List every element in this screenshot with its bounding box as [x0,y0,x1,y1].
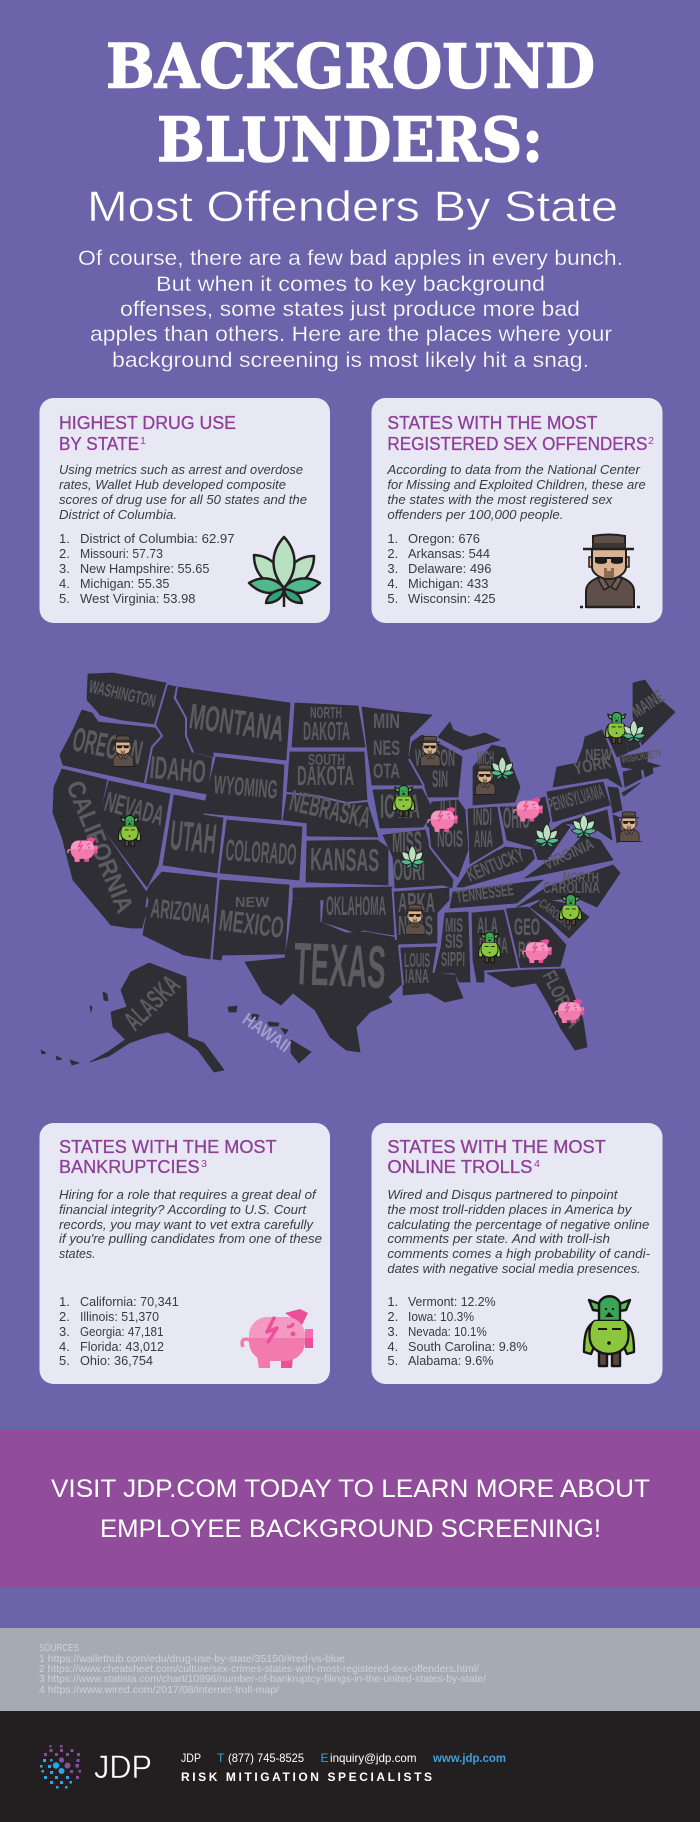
marker: pig, California [68,837,98,862]
text: bankruptcies description: if you're pulling candidates from one of these [59,1231,322,1246]
contact line: E [320,1751,329,1765]
state name labels: WASHINGTON [87,676,158,711]
intro paragraph: background screening is most likely hit a snag. [112,348,589,372]
state name labels: NEW [235,894,270,911]
heading: bankruptcies: BANKRUPTCIES [59,1157,200,1177]
panel: highest drug use [40,398,330,623]
list: bankruptcies ranking: 2. [59,1309,70,1324]
list: bankruptcies ranking: 4. [59,1339,70,1354]
intro paragraph [78,246,623,372]
marker: leaf, Missouri [400,845,425,870]
text: sex offenders description: offenders per 100,000 people. [387,507,563,522]
contact line [181,1751,506,1765]
list: drug use ranking: New Hampshire: 55.65 [80,561,209,576]
list: sex offenders ranking: Michigan: 433 [408,576,488,591]
state name labels: SIS [445,931,463,953]
text: drug use description [59,462,307,522]
contact line: (877) 745-8525 [228,1751,304,1765]
state name labels: CALIFORNIA [60,777,139,917]
state name labels: MIN [373,710,400,733]
list: bankruptcies ranking: Florida: 43,012 [80,1339,164,1354]
list: drug use ranking [59,531,235,606]
text: drug use description: rates, Wallet Hub developed composite [59,477,286,492]
list: sex offenders ranking: Oregon: 676 [408,531,480,546]
marker: troll, Nevada [118,815,141,846]
state name labels: SIN [432,766,448,793]
logo mark [40,1745,81,1788]
list: sex offenders ranking: Wisconsin: 425 [408,591,496,606]
list: drug use ranking: 3. [59,561,70,576]
list: trolls ranking: 5. [387,1353,398,1368]
state name labels: RGIA [518,937,544,964]
text: drug use description: scores of drug use for all 50 states and the [59,492,307,507]
state name labels: KENTUCKY [464,844,528,887]
marker: pig, Ohio [514,798,543,821]
state name labels: ALA [477,913,498,938]
marker: troll, Vermont [605,712,628,743]
marker: troll, Iowa [392,785,415,816]
state name labels: FLORIDA [538,967,585,1032]
icon: troll [584,1296,634,1366]
list: drug use ranking: 1. [59,531,70,546]
list: drug use ranking: 4. [59,576,70,591]
state name labels: NES [373,737,400,760]
marker: troll, Alabama [479,932,500,963]
text: bankruptcies description [59,1187,322,1261]
call to action banner [0,1430,700,1588]
state name labels: WISCON [415,745,455,772]
state name labels: MONTANA [187,695,287,749]
list: sex offenders ranking: 5. [387,591,398,606]
contact line: inquiry@jdp.com [330,1751,416,1765]
text: sex offenders description: According to data from the National Center [386,462,641,477]
list: drug use ranking: District of Columbia: 62.97 [80,531,235,546]
footer [0,1711,700,1822]
text: sex offenders description: the states with the most registered sex [387,492,613,507]
sources: 3 https://www.statista.com/chart/10996/number-of-bankruptcy-filings-in-the-united-states-by-state/ [39,1673,486,1685]
heading: trolls: ONLINE TROLLS [387,1157,532,1177]
state name labels: UTAH [168,811,219,863]
text: trolls description: Wired and Disqus partnered to pinpoint [387,1187,619,1202]
marker: pig, Illinois [428,807,458,832]
state name labels: HAWAII [239,1009,294,1056]
heading: sex offenders: STATES WITH THE MOST [387,413,597,433]
intro paragraph: But when it comes to key background [156,272,545,296]
state name labels: OTA [373,760,400,783]
state name labels: INDI [473,804,492,831]
state name labels: KANSAS [310,841,379,878]
state name labels: ANA [474,826,493,853]
marker: pig, Florida [555,999,584,1023]
icon: man in hat [580,534,640,607]
state name labels: DAKOTA [303,716,350,746]
panel: online trolls [372,1123,662,1384]
text: bankruptcies description: Hiring for a role that requires a great deal of [59,1187,317,1202]
text: trolls description: dates with negative social media presences. [387,1261,641,1276]
icon: broken piggy bank [242,1309,313,1368]
heading: drug use [59,413,236,454]
subtitle: Most Offenders By State [87,183,618,231]
state name labels [60,676,668,1056]
state name labels: MISS [392,826,422,859]
state name labels: TENNESSEE [455,879,515,907]
state name labels: ILLI [440,796,457,823]
heading: drug use: BY STATE [59,434,139,454]
list: bankruptcies ranking: 3. [59,1324,70,1339]
logo wordmark: JDP [94,1749,152,1785]
state name labels: NOIS [437,826,463,853]
text: trolls description: calculating the percentage of negative online [387,1217,649,1232]
state name labels: NEVADA [101,786,167,831]
state name labels: IANA [405,966,429,988]
text: sex offenders description [386,462,646,522]
sources: SOURCES [39,1642,79,1654]
state name labels: NEW [585,747,613,764]
list: drug use ranking: 2. [59,546,70,561]
state name labels: CAROLINA [543,880,600,897]
marker: leaf, Michigan [490,757,515,780]
heading: trolls: STATES WITH THE MOST [387,1137,606,1157]
state name labels: IOWA [380,788,420,826]
sources: 2 https://www.cheatsheet.com/culture/sex-crimes-states-with-most-registered-sex-offenders.html/ [39,1663,479,1675]
marker: man, Oregon [111,736,136,767]
text: drug use description: District of Columbia. [59,507,177,522]
state name labels: DAKOTA [297,760,354,791]
state name labels: GEO [514,914,540,941]
marker: pig, Georgia [523,939,552,963]
intro paragraph: apples than others. Here are the places where your [90,322,612,346]
state name labels: SOUTH [308,752,345,769]
state name labels: NSAS [398,910,433,941]
heading: bankruptcies: 3 [201,1159,207,1170]
marker: man, Delaware [617,812,642,842]
state name labels: MAINE [628,686,668,721]
text: bankruptcies description: records, you may want to vet extra carefully [59,1217,315,1232]
list: bankruptcies ranking: Ohio: 36,754 [80,1353,153,1368]
list: sex offenders ranking [387,531,496,606]
text: trolls description: the most troll-ridden places in America by [387,1202,633,1217]
contact line: www.jdp.com [432,1751,506,1765]
list: trolls ranking: Iowa: 10.3% [408,1309,474,1324]
state name labels: VIRGINIA [542,836,597,874]
list: trolls ranking [387,1294,528,1368]
list: trolls ranking: 2. [387,1309,398,1324]
intro paragraph: Of course, there are a few bad apples in every bunch. [78,246,623,270]
list: trolls ranking: 1. [387,1294,398,1309]
state name labels: WYOMING [212,769,279,805]
list: bankruptcies ranking: 5. [59,1353,70,1368]
heading: trolls [387,1137,606,1177]
list: sex offenders ranking: 3. [387,561,398,576]
text: bankruptcies description: states. [59,1246,96,1261]
heading: trolls: 4 [534,1159,540,1170]
text: trolls description: comments comes a high probability of candi- [387,1246,651,1261]
icon: cannabis leaf [249,537,320,607]
list: sex offenders ranking: 1. [387,531,398,546]
marker: man, Wisconsin [418,736,443,766]
text: sex offenders description: for Missing and Exploited Children, these are [387,477,646,492]
state name labels: BAMA [479,933,508,958]
heading: sex offenders: 2 [648,436,654,447]
list: sex offenders ranking: 4. [387,576,398,591]
contact line: JDP [181,1751,201,1765]
state name labels: COLORADO [225,834,298,872]
heading: drug use: 1 [140,436,146,447]
title [106,32,595,176]
text: drug use description: Using metrics such as arrest and overdose [59,462,303,477]
list: sex offenders ranking: Arkansas: 544 [408,546,490,561]
list: trolls ranking: 3. [387,1324,398,1339]
sources [0,1628,700,1711]
tagline: RISK MITIGATION SPECIALISTS [181,1770,432,1784]
state name labels: NORTH [310,705,342,722]
title: BACKGROUND [106,32,595,102]
sources: 4 https://www.wired.com/2017/08/internet-troll-map/ [39,1684,279,1696]
state name labels: NEBRASKA [286,785,374,835]
state shapes [41,673,675,1072]
marker: troll, South Carolina [559,894,582,925]
state name labels: LOUIS [404,950,430,972]
state name labels: MIS [445,915,463,937]
heading: drug use: HIGHEST DRUG USE [59,413,236,433]
heading: bankruptcies: STATES WITH THE MOST [59,1137,277,1157]
state name labels: OURI [393,854,425,887]
list: trolls ranking: Nevada: 10.1% [408,1324,487,1339]
list: bankruptcies ranking: 1. [59,1294,70,1309]
state name labels: ARKA [398,887,435,918]
state name labels: MICH [477,748,494,770]
list: drug use ranking: West Virginia: 53.98 [80,591,196,606]
marker: leaf, West Virginia [534,824,560,848]
list: trolls ranking: 4. [387,1339,398,1354]
intro paragraph: offenses, some states just produce more bad [120,297,580,321]
list: trolls ranking: Alabama: 9.6% [408,1353,494,1368]
state name labels: ALASKA [118,969,186,1036]
state name labels: CAROLINA [536,896,577,933]
list: bankruptcies ranking: California: 70,341 [80,1294,179,1309]
text: trolls description [387,1187,651,1276]
text: trolls description: comments per state. And with troll-ish [387,1231,610,1246]
text: bankruptcies description: financial integrity? According to U.S. Court [59,1202,307,1217]
panel: sex offenders [372,398,662,623]
list: trolls ranking: Vermont: 12.2% [408,1294,496,1309]
title: BLUNDERS: [157,105,543,176]
marker: leaf, Washington DC [571,814,597,839]
marker: man, Michigan [473,765,498,795]
state name labels: NORTH [563,869,599,885]
contact line: T [217,1751,225,1765]
heading: sex offenders: REGISTERED SEX OFFENDERS [387,434,647,454]
list: trolls ranking: South Carolina: 9.8% [408,1339,528,1354]
state name labels: OREGON [69,721,146,772]
state name labels: OHIO [503,802,530,835]
state name labels: IDAHO [148,749,207,790]
state name labels: YORK [572,751,613,779]
heading: bankruptcies [59,1137,277,1177]
call to action banner: EMPLOYEE BACKGROUND SCREENING! [100,1515,601,1543]
list: drug use ranking: Michigan: 55.35 [80,576,169,591]
list: bankruptcies ranking [59,1294,179,1368]
map of the United States [41,673,675,1072]
list: bankruptcies ranking: Georgia: 47,181 [80,1324,164,1339]
state name labels: SIPPI [441,949,465,971]
sources: 1 https://wallethub.com/edu/drug-use-by-state/35150/#red-vs-blue [39,1653,345,1665]
list: drug use ranking: 5. [59,591,70,606]
list: bankruptcies ranking: Illinois: 51,370 [80,1309,159,1324]
list: sex offenders ranking: Delaware: 496 [408,561,491,576]
heading: sex offenders [387,413,654,454]
state name labels: OKLAHOMA [326,891,386,921]
state name labels: ARIZONA [149,893,212,929]
marker: leaf, New Hampshire [622,720,646,743]
state name labels: TEXAS [292,930,387,1001]
state name labels: MEXICO [217,904,286,945]
list: sex offenders ranking: 2. [387,546,398,561]
panel: bankruptcies [40,1123,330,1384]
call to action banner: VISIT JDP.COM TODAY TO LEARN MORE ABOUT [51,1475,650,1503]
state name labels: PENNSYLVANIA [546,781,606,817]
marker: man, Arkansas [403,905,428,935]
list: drug use ranking: Missouri: 57.73 [80,546,163,561]
